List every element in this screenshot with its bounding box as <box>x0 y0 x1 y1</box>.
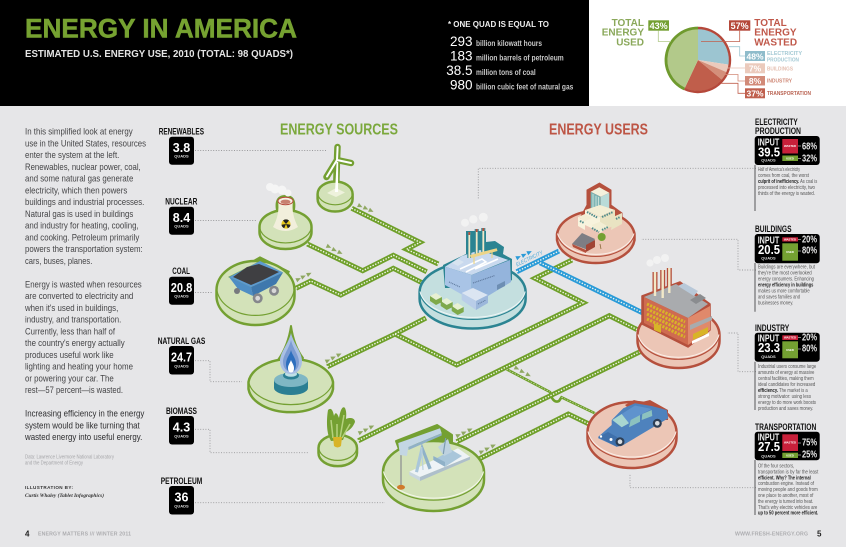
user panel: buildings: INPUT <box>758 234 780 246</box>
intro text: In this simplified look at energy <box>25 126 133 136</box>
source card: natural gas: QUADS <box>174 364 189 368</box>
user panel: industry: 20% <box>802 332 817 344</box>
intro text: buildings and industrial processes. <box>25 197 144 207</box>
footer left <box>25 530 131 538</box>
intro text <box>24 126 146 442</box>
icon: oil pump jack <box>383 425 484 511</box>
user panel: buildings: QUADS <box>761 256 776 260</box>
intro text: electricity, which then powers <box>25 185 128 195</box>
subtitle: ESTIMATED U.S. ENERGY USE, 2010 (TOTAL: 98 QUADS*) <box>25 48 293 60</box>
intro text: powers the transportation system: <box>25 244 143 254</box>
user panel: buildings: 80% <box>802 246 817 256</box>
flow arrows <box>295 203 532 455</box>
intro text: use in the United States, resources <box>25 138 146 148</box>
user panel: industry: Industrial users consume large <box>758 364 816 370</box>
pipe: electricity <box>517 251 644 314</box>
intro text: Currently, less than half of <box>25 326 115 336</box>
pie legend: ENERGY <box>754 28 797 39</box>
user panel: buildings: businesses money. <box>758 300 793 306</box>
user panel: electricity production: INPUT <box>758 136 780 148</box>
quad equivalents: billion kilowatt hours <box>476 39 542 48</box>
source card: nuclear: 8.4 <box>173 211 190 225</box>
user panel: transportation: 75% <box>802 438 817 448</box>
intro text: are converted to electricity and <box>25 291 133 301</box>
pie legend: 37% <box>746 89 764 99</box>
quad equivalents: billion cubic feet of natural gas <box>476 82 574 91</box>
source card: renewables: RENEWABLES <box>159 126 204 136</box>
intro text: lighting and heating your home <box>25 362 133 372</box>
user panel: industry: amounts of energy at massive <box>758 370 814 376</box>
quad equivalents: million barrels of petroleum <box>476 54 564 63</box>
user panel: industry: energy to do more work boosts <box>758 400 816 406</box>
icon: nuclear plant <box>260 183 312 249</box>
user panel: buildings: 20.5 <box>758 242 780 257</box>
user panel: industry: strong motivator: using less <box>758 394 811 400</box>
intro text: system would be like turning that <box>25 420 140 430</box>
source card: renewables: 3.8 <box>173 141 190 155</box>
user panel: transportation: 25% <box>802 450 817 461</box>
user panel: transportation: Of the four sectors, <box>758 464 794 470</box>
user panel: buildings: and saves families and <box>758 294 800 300</box>
intro text: or powering your car. The <box>25 373 114 383</box>
heading: energy sources: ENERGY SOURCES <box>280 122 398 138</box>
user panel: transportation: USED <box>786 453 794 457</box>
pipe: coal to plant <box>296 268 422 295</box>
user panel: transportation: 27.5 <box>758 439 780 454</box>
user panel: buildings: WASTED <box>784 237 796 241</box>
source card: petroleum: 36 <box>175 490 188 504</box>
intro text: Increasing efficiency in the energy <box>25 408 145 418</box>
icon: power plant <box>420 213 526 328</box>
user panel: buildings: BUILDINGS <box>755 224 792 234</box>
user panel: electricity production: ELECTRICITY <box>755 117 798 127</box>
intro text: and cooking. Petroleum primarily <box>25 232 140 242</box>
source card: biomass: BIOMASS <box>166 406 197 416</box>
pipe: petroleum to factory <box>457 352 640 442</box>
user panel: industry: QUADS <box>761 354 776 359</box>
dotted leader lines <box>195 150 756 503</box>
user panel: transportation: QUADS <box>761 453 776 458</box>
source card: coal <box>169 266 194 305</box>
intro text: industry, and transportation. <box>25 314 121 324</box>
user panel: electricity production <box>755 117 820 211</box>
user panel: industry: ideal candidates for increased <box>758 382 815 388</box>
source card: biomass <box>166 406 197 444</box>
quad equivalents: * ONE QUAD IS EQUAL TO <box>448 19 549 29</box>
user panel: electricity production: culprit of inefficiency. As coal is <box>758 179 818 185</box>
title: ENERGY IN AMERICA <box>25 14 297 44</box>
user panel: buildings: 20% <box>802 234 817 246</box>
footer right: 5 <box>817 530 822 538</box>
source card: renewables: QUADS <box>174 154 189 159</box>
intro text: cars, buses, planes. <box>25 256 92 266</box>
intro text: produces useful work like <box>25 350 114 360</box>
user panel: industry: 23.3 <box>758 340 780 355</box>
source card: coal: QUADS <box>174 294 189 299</box>
user panel: electricity production: 39.5 <box>758 144 780 159</box>
user panel: transportation: TRANSPORTATION <box>755 422 816 432</box>
source card: renewables <box>159 126 204 165</box>
data source: Data: Lawrence Livermore National Laboratory <box>25 454 114 460</box>
pie legend: 43% <box>650 21 668 31</box>
quad equivalents: 293 <box>450 34 472 49</box>
quad equivalents: million tons of coal <box>476 68 536 77</box>
footer right <box>735 530 822 538</box>
data source: and the Department of Energy <box>25 460 83 466</box>
pie legend: INDUSTRY <box>767 78 792 84</box>
user panel: transportation: the energy is turned into heat. <box>758 499 813 505</box>
pie legend: TRANSPORTATION <box>767 91 811 97</box>
intro text: the country's energy actually <box>25 338 125 348</box>
pie chart: used vs wasted <box>666 28 730 92</box>
quad equivalents: 38.5 <box>446 63 472 78</box>
source card: coal: COAL <box>172 266 190 276</box>
pie legend: 8% <box>749 76 762 86</box>
pie legend: ENERGY <box>602 28 644 39</box>
pipe: branch to car <box>507 369 595 413</box>
icon: buildings <box>557 183 634 263</box>
user panel: industry: USED <box>786 348 794 352</box>
source card: petroleum: PETROLEUM <box>161 476 202 486</box>
user panel: buildings: USED <box>786 250 794 254</box>
footer left: 4 <box>25 530 30 538</box>
user panel: transportation <box>755 422 820 517</box>
user panel: industry <box>755 323 820 412</box>
user panel: industry: INPUT <box>758 333 780 345</box>
user panel: electricity production: comes from coal, the worst <box>758 173 809 179</box>
user panel: electricity production: 32% <box>802 154 817 165</box>
icon: wind turbine <box>318 147 353 212</box>
user panel: industry: production and saves money. <box>758 406 813 412</box>
source card: nuclear: NUCLEAR <box>165 196 198 206</box>
illustration credit: ILLUSTRATION BY: <box>25 485 73 490</box>
user panel: industry: 80% <box>802 344 817 355</box>
icon: coal cart <box>216 258 294 325</box>
source card: petroleum <box>161 476 202 514</box>
user panel: buildings <box>755 224 820 312</box>
intro text: wasted energy into useful energy. <box>24 432 142 442</box>
user panel: electricity production: processed into electricity, two <box>758 185 815 191</box>
user panel: electricity production: thirds of the energy is wasted. <box>758 191 815 197</box>
pipe: biomass and natural gas to factory <box>358 316 637 441</box>
user panel: transportation: WASTED <box>784 440 796 444</box>
data source <box>25 454 114 466</box>
source card: nuclear <box>165 196 198 235</box>
icon: factory <box>638 254 720 368</box>
user panel: electricity production: USED <box>786 156 794 160</box>
intro text: Natural gas is used in buildings <box>25 209 134 219</box>
pipe: wind to plant <box>352 208 438 264</box>
icon: natural gas flame <box>248 326 333 412</box>
user panel: transportation: moving people and goods from <box>758 487 818 493</box>
user panel: transportation: efficient. Why? The internal <box>758 475 811 481</box>
intro text: when it's used in buildings, <box>24 303 118 313</box>
intro text: and some natural gas generate <box>25 174 133 184</box>
pie legend: PRODUCTION <box>767 57 799 63</box>
user panel: industry: INDUSTRY <box>755 323 789 333</box>
pipe: nuclear to plant <box>307 244 427 272</box>
user panel: electricity production: WASTED <box>784 144 796 148</box>
user panel: electricity production: PRODUCTION <box>755 126 801 136</box>
pie legend: WASTED <box>754 38 797 49</box>
user panel: transportation: That's why electric vehicles are <box>758 505 817 511</box>
source card: natural gas: NATURAL GAS <box>158 336 205 346</box>
user panel: buildings: they're the most overlooked <box>758 270 812 276</box>
icon: biomass plant <box>318 407 357 466</box>
source card: natural gas <box>158 336 205 374</box>
source card: coal: 20.8 <box>171 281 192 295</box>
pie legend: TOTAL <box>612 18 644 29</box>
user panel: transportation: transportation is by far the least <box>758 469 819 475</box>
pie legend: TOTAL <box>754 18 787 29</box>
intro text: Energy is wasted when resources <box>25 279 142 289</box>
user panel: electricity production: QUADS <box>761 158 776 162</box>
footer right: WWW.FRESH-ENERGY.ORG <box>735 532 808 538</box>
user panel: transportation: up to 50 percent more efficient. <box>758 511 819 517</box>
user panel: transportation: combustion engine. Instead of <box>758 481 814 487</box>
user panel: buildings: Buildings are everywhere, but <box>758 264 815 270</box>
pie legend: 7% <box>749 64 762 74</box>
icon: car <box>588 400 676 468</box>
quad equivalents <box>446 19 574 92</box>
pie legend: ELECTRICITY <box>767 51 802 57</box>
user panel: electricity production: 68% <box>802 141 817 152</box>
pie legend: USED <box>616 38 644 49</box>
footer left: ENERGY MATTERS /// WINTER 2011 <box>38 532 131 538</box>
source card: biomass: 4.3 <box>173 420 190 434</box>
pie legend: BUILDINGS <box>767 66 793 72</box>
electricity label: ELECTRICITY <box>515 250 544 268</box>
pie legend <box>602 18 811 99</box>
heading: energy users: ENERGY USERS <box>549 122 648 138</box>
user panel: transportation: INPUT <box>758 432 780 444</box>
source card: biomass: QUADS <box>174 434 189 438</box>
user panel: buildings: energy consumers. Enhancing <box>758 276 814 282</box>
quad equivalents: 980 <box>450 77 472 92</box>
user panel: buildings: energy efficiency in buildings <box>758 282 813 288</box>
intro text: enter the system at the left. <box>25 150 119 160</box>
source card: nuclear: QUADS <box>174 224 189 229</box>
pie legend: 57% <box>731 21 749 31</box>
pie legend: 48% <box>746 51 764 61</box>
pipe: natural gas to plant and buildings <box>327 260 583 367</box>
user panel: industry: efficiency. The market is a <box>758 388 808 394</box>
illustration credit: Curtis Whaley (Tablet Infographics) <box>25 492 104 499</box>
header panel <box>0 0 846 106</box>
source card: natural gas: 24.7 <box>171 350 192 364</box>
user panel: industry: WASTED <box>784 336 796 340</box>
user panel: buildings: makes us more comfortable <box>758 288 810 294</box>
intro text: Renewables, nuclear power, coal, <box>25 162 141 172</box>
user panel: electricity production: Half of America's electricity <box>758 167 800 173</box>
user panel: transportation: one place to another, most of <box>758 493 814 499</box>
pipe: petroleum to car <box>478 414 590 460</box>
user panel: industry: central facilities, making them <box>758 376 814 382</box>
intro text: and industry for heating, cooling, <box>25 220 139 230</box>
quad equivalents: 183 <box>450 49 472 64</box>
source card: petroleum: QUADS <box>174 504 189 508</box>
intro text: rest—57 percent—is wasted. <box>25 385 123 395</box>
illustration credit <box>25 485 104 499</box>
